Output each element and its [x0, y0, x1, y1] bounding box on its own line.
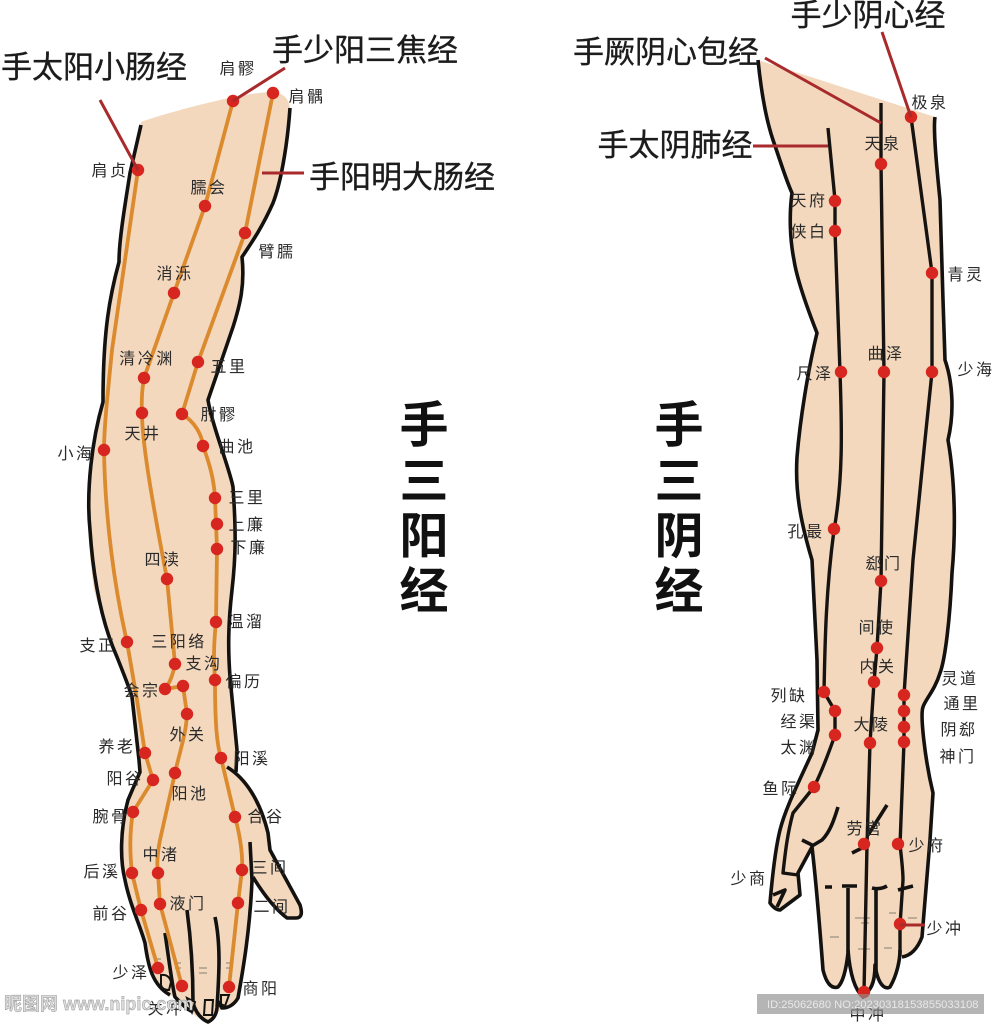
acupoint labels: 曲泽 — [867, 345, 905, 363]
right arm: three yin meridians — [730, 60, 994, 1024]
acupoint labels: 经渠 — [780, 713, 818, 731]
acupoint labels: 清冷渊 — [119, 350, 175, 368]
acupoint labels: 鱼际 — [762, 780, 800, 798]
acupoint labels: 消泺 — [156, 265, 194, 283]
arm skin fill — [758, 60, 954, 997]
acupoint labels: 中渚 — [142, 846, 180, 864]
acupoint labels — [730, 94, 994, 1024]
heading: three yin meridians of hand — [654, 399, 704, 619]
arm outline — [89, 108, 301, 1022]
acupoint labels: 小海 — [57, 445, 95, 463]
acupoint labels: 三阳络 — [151, 632, 207, 651]
acupoint labels — [57, 60, 326, 1018]
acupoint labels: 神门 — [939, 748, 977, 766]
acupoint labels: 尺泽 — [796, 365, 834, 383]
acupoint labels: 孔最 — [787, 523, 825, 541]
acupoint labels: 少海 — [957, 361, 994, 379]
acupoint labels: 上廉 — [228, 516, 266, 534]
acupoint labels: 郄门 — [865, 555, 903, 573]
heading: three yin meridians of hand: 三 — [654, 455, 704, 509]
acupoint labels: 支正 — [79, 637, 117, 655]
acupoint labels: 肘髎 — [200, 406, 238, 424]
acupoint labels: 劳宫 — [846, 820, 884, 838]
finger creases — [830, 913, 917, 949]
small intestine meridian — [104, 170, 158, 968]
acupoint labels: 肩髃 — [288, 88, 326, 106]
acupoint labels: 少商 — [730, 870, 768, 888]
acupoint labels: 下廉 — [230, 539, 268, 557]
title: pericardium meridian: 手厥阴心包经 — [573, 35, 759, 70]
title: large intestine meridian: 手阳明大肠经 — [309, 160, 495, 195]
acupoint labels: 四渎 — [144, 551, 182, 569]
arm outline — [758, 60, 954, 997]
acupoint labels: 阳谷 — [106, 770, 144, 788]
acupoint labels: 侠白 — [790, 223, 828, 241]
acupoint labels: 五里 — [210, 358, 248, 376]
acupoint labels: 大陵 — [853, 716, 891, 734]
pericardium meridian — [864, 103, 884, 992]
acupoint labels: 液门 — [169, 895, 207, 913]
acupoint labels: 曲池 — [218, 438, 256, 456]
acupoint labels: 太渊 — [780, 739, 818, 757]
acupoint labels: 肩贞 — [91, 162, 129, 180]
acupoint labels: 极泉 — [911, 94, 949, 112]
acupoint labels: 三里 — [228, 489, 266, 507]
acupoint labels: 阳溪 — [233, 750, 271, 768]
acupoint labels: 商阳 — [242, 980, 280, 998]
acupoint labels: 腕骨 — [92, 808, 130, 826]
acupoint labels: 少府 — [908, 837, 946, 855]
acupoint labels: 温溜 — [227, 613, 265, 631]
heading: three yang meridians of hand — [399, 399, 449, 619]
triple energizer meridian — [142, 101, 233, 986]
title: lung meridian: 手太阴肺经 — [598, 128, 752, 163]
acupoint labels: 三间 — [251, 859, 289, 877]
heading: three yang meridians of hand: 手 — [399, 399, 449, 453]
acupoint labels: 阳池 — [171, 785, 209, 803]
acupoint labels: 偏历 — [225, 673, 263, 691]
acupoint labels: 灵道 — [941, 670, 979, 688]
title: small intestine meridian: 手太阳小肠经 — [1, 50, 187, 85]
heading: three yin meridians of hand: 阴 — [654, 510, 704, 564]
leader lines: yang meridians — [100, 68, 304, 173]
heading: three yang meridians of hand: 阳 — [399, 510, 449, 564]
lung meridian — [783, 128, 841, 875]
acupoint labels: 合谷 — [247, 808, 285, 826]
watermark: image id bar — [757, 994, 984, 1014]
heading: three yang meridians of hand: 三 — [399, 455, 449, 509]
title: triple energizer meridian: 手少阳三焦经 — [272, 33, 458, 68]
leader lines: yin meridians — [753, 32, 925, 925]
heading: three yin meridians of hand: 经 — [654, 565, 704, 619]
acupoint labels: 肩髎 — [219, 60, 257, 78]
watermark: site logo: 昵图网 www.nipic.com — [4, 994, 193, 1014]
acupoint labels: 间使 — [858, 619, 896, 637]
acupoint labels: 阴郄 — [940, 721, 978, 739]
acupoint labels: 前谷 — [92, 905, 130, 923]
acupoint labels: 天府 — [790, 192, 828, 210]
acupoint labels: 少冲 — [926, 920, 964, 938]
acupoint labels: 会宗 — [123, 682, 161, 700]
acupoint labels: 外关 — [169, 726, 207, 744]
acupoint labels: 天井 — [124, 425, 162, 443]
heading: three yin meridians of hand: 手 — [654, 399, 704, 453]
acupoint labels: 关冲 — [147, 1000, 185, 1018]
finger creases — [155, 959, 232, 973]
acupoint labels: 通里 — [943, 695, 981, 713]
acupoint labels: 内关 — [859, 658, 897, 676]
acupoint labels: 后溪 — [83, 863, 121, 881]
acupoint labels: 列缺 — [770, 687, 808, 705]
acupoint labels: 青灵 — [947, 266, 985, 284]
acupoint labels: 二间 — [253, 898, 291, 916]
heart meridian — [900, 117, 932, 955]
acupoint labels: 养老 — [98, 738, 136, 756]
acupoint labels: 臂臑 — [258, 243, 296, 261]
arm skin fill — [88, 92, 301, 1022]
left arm: three yang meridians — [57, 60, 326, 1022]
watermark: image id bar: ID:25062680 NO:20230318153855033108 — [767, 999, 979, 1011]
acupoint labels: 臑会 — [190, 179, 228, 197]
acupoints — [98, 87, 279, 993]
acupoint labels: 少泽 — [112, 964, 150, 982]
heading: three yang meridians of hand: 经 — [399, 565, 449, 619]
acupoint labels: 天泉 — [864, 135, 902, 153]
large intestine meridian — [182, 93, 273, 987]
acupoints — [808, 111, 938, 998]
acupoint labels: 支沟 — [185, 655, 223, 673]
acupoint labels: 中冲 — [849, 1006, 887, 1024]
